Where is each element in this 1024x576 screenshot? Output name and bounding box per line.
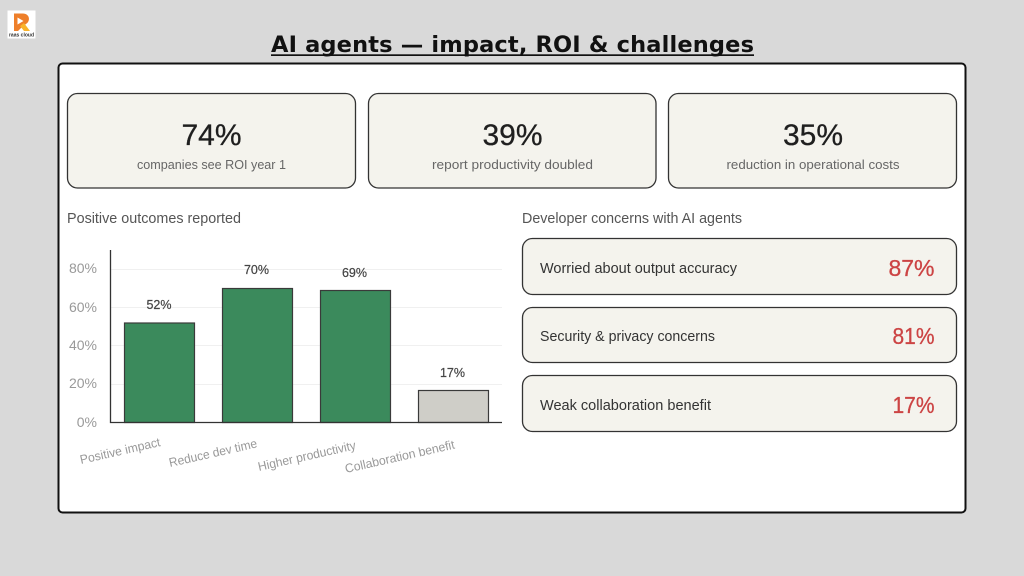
stat card: 74% xyxy=(68,94,356,188)
main panel xyxy=(58,64,966,512)
stat card: 35%: reduction in operational costs xyxy=(726,157,900,172)
bar chart: positive outcomes: 17% xyxy=(440,366,465,380)
bar chart: positive outcomes: 20% xyxy=(69,375,97,391)
bar chart: positive outcomes: Reduce dev time xyxy=(168,436,258,470)
concern row: security and privacy: Security & privacy concerns xyxy=(540,329,715,345)
bar: collaboration benefit xyxy=(418,390,488,422)
concern row: security and privacy: 81% xyxy=(892,323,934,349)
stat card: 39%: report productivity doubled xyxy=(432,157,593,172)
bar chart: positive outcomes: 80% xyxy=(69,260,97,276)
title: AI agents — impact, ROI & challenges xyxy=(271,32,754,58)
stat card: 35%: 35% xyxy=(783,119,843,152)
logo: raas cloud xyxy=(8,10,36,38)
bar chart: positive outcomes: Collaboration benefit xyxy=(344,438,456,476)
bar chart: positive outcomes: 60% xyxy=(69,299,97,315)
bar chart: positive outcomes: 70% xyxy=(244,263,269,277)
bar chart: positive outcomes: Positive impact xyxy=(79,435,162,467)
concern row: security and privacy xyxy=(522,308,956,362)
bar chart: positive outcomes: 0% xyxy=(77,414,97,430)
heading: positive outcomes: Positive outcomes reported xyxy=(67,211,241,227)
concern row: output accuracy xyxy=(522,238,956,294)
concern row: weak collaboration xyxy=(522,376,956,432)
concern row: weak collaboration: Weak collaboration benefit xyxy=(540,398,711,414)
stat card: 35% xyxy=(668,94,956,188)
logo: raas cloud: raas cloud xyxy=(9,32,34,38)
stat card: 39% xyxy=(368,94,656,188)
bar chart: positive outcomes: Higher productivity xyxy=(257,438,358,474)
concern row: output accuracy: 87% xyxy=(888,255,934,281)
bar chart: positive outcomes: 52% xyxy=(146,298,172,312)
heading: developer concerns: Developer concerns with AI agents xyxy=(522,211,742,227)
concern row: weak collaboration: 17% xyxy=(892,392,934,418)
concern row: output accuracy: Worried about output accuracy xyxy=(540,261,738,277)
bar: higher productivity xyxy=(320,290,390,422)
bar chart: positive outcomes: 69% xyxy=(342,266,367,280)
stat card: 39%: 39% xyxy=(482,119,543,152)
bar chart: positive outcomes: 40% xyxy=(69,337,97,353)
stat card: 74%: 74% xyxy=(181,119,242,152)
stat card: 74%: companies see ROI year 1 xyxy=(137,157,286,172)
bar chart: positive outcomes xyxy=(69,250,502,476)
bar: reduce dev time xyxy=(222,288,292,422)
bar: positive impact xyxy=(124,323,194,422)
